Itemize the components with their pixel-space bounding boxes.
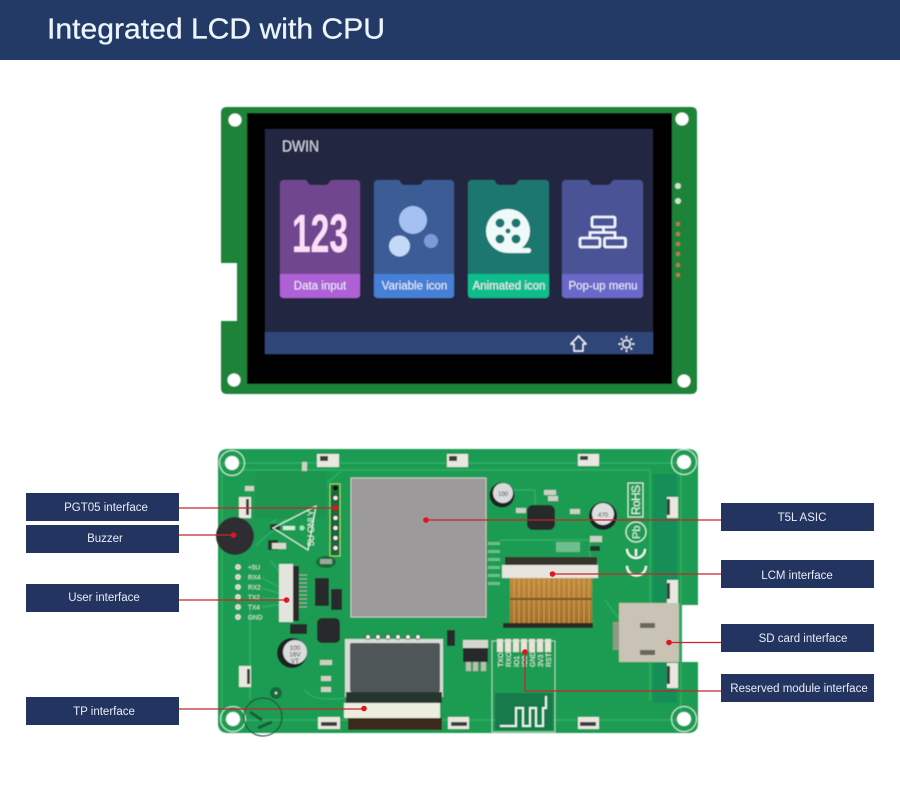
5V warning triangle <box>273 506 316 550</box>
capacitor right <box>589 502 617 530</box>
label: PGT05 interface <box>26 493 179 521</box>
icon: settings sun <box>618 336 634 352</box>
reserved module pads: RXO <box>506 651 513 667</box>
TP display window <box>345 634 443 703</box>
reserved module pads <box>492 639 555 732</box>
TP leader <box>179 706 367 711</box>
label: TP interface: TP interface <box>73 706 135 718</box>
regulator component <box>463 640 488 671</box>
label: LCM interface: LCM interface <box>761 570 833 582</box>
card: variable icon <box>374 180 454 298</box>
header banner <box>0 0 900 60</box>
SD leader <box>666 640 721 645</box>
card: variable icon: Variable icon <box>382 280 447 292</box>
power components near user connector <box>290 505 555 646</box>
edge contacts <box>675 183 681 277</box>
card: pop-up menu <box>562 180 643 298</box>
CE mark <box>627 549 646 576</box>
reserved module pads: IO0 <box>522 656 529 667</box>
black LCD bezel <box>247 113 672 384</box>
Pb-free mark <box>626 522 646 542</box>
card: pop-up menu: Pop-up menu <box>568 280 638 292</box>
card: data input <box>280 180 360 298</box>
screen <box>265 129 653 354</box>
user interface pad labels: +5U <box>248 564 260 572</box>
reserved module pads: IO1 <box>514 656 521 667</box>
RoHS mark: RoHS <box>629 485 643 515</box>
icon: home <box>571 336 586 351</box>
PGT05 header pins <box>330 484 340 556</box>
label: SD card interface: SD card interface <box>759 633 847 645</box>
LCM leader <box>550 571 721 577</box>
capacitor upper: 100 <box>498 492 509 498</box>
front PCB board <box>221 107 697 394</box>
user interface leader <box>179 597 289 603</box>
label: Buzzer: Buzzer <box>87 533 123 545</box>
buzzer <box>216 517 254 555</box>
silkscreen logo circle <box>244 687 282 736</box>
DWIN logo text: DWIN <box>282 138 319 156</box>
label: Reserved module interface <box>721 674 874 702</box>
TP connector <box>344 703 442 730</box>
capacitor right: 470 <box>598 513 609 519</box>
5V warning triangle: 5U ONLY <box>306 510 316 546</box>
reserved module pads: TXO <box>498 652 505 667</box>
callout leader lines <box>179 505 721 711</box>
user interface pad labels: TX4 <box>248 604 260 612</box>
card: data input: Data input <box>294 280 347 292</box>
label: PGT05 interface: PGT05 interface <box>64 502 148 514</box>
title: Integrated LCD with CPU <box>47 14 385 46</box>
label: LCM interface <box>721 560 874 588</box>
electrolytic capacitor <box>277 638 307 668</box>
user interface pad labels: TX2 <box>248 594 260 602</box>
card: animated icon: Animated icon <box>473 280 545 292</box>
card: animated icon <box>468 180 549 298</box>
reserved module pads: RST <box>546 652 553 667</box>
grey via field beside chip <box>488 542 580 585</box>
user interface pad labels <box>236 564 263 622</box>
user interface pad labels: RX2 <box>248 584 261 592</box>
card: data input: 123 <box>292 204 348 264</box>
user interface pad labels: RX4 <box>248 574 261 582</box>
label: T5L ASIC <box>721 503 874 531</box>
label: SD card interface <box>721 624 874 652</box>
bottom navigation bar <box>265 332 653 354</box>
back view of PCB <box>216 449 698 736</box>
clips along board edge <box>239 454 678 729</box>
user interface pad labels: GND <box>248 614 263 622</box>
T5L ASIC chip shield <box>351 478 486 617</box>
user FFC connector <box>279 564 307 622</box>
back PCB board <box>218 449 698 733</box>
PGT05 leader <box>179 505 338 511</box>
small SMD components <box>245 462 602 692</box>
label: User interface: User interface <box>68 592 140 604</box>
capacitor upper <box>490 482 514 508</box>
reserved module leader <box>522 649 721 691</box>
label: User interface <box>26 584 179 612</box>
front view of LCD module <box>221 107 697 394</box>
SD card socket <box>613 603 679 662</box>
label: Buzzer <box>26 525 179 553</box>
buzzer leader <box>179 532 236 538</box>
copper areas and traces <box>222 463 681 720</box>
T5L leader <box>423 517 721 523</box>
electrolytic capacitor: VT <box>291 658 299 665</box>
antenna <box>495 693 553 730</box>
reserved module pads: GND <box>530 651 537 667</box>
reserved module pads: 3V3 <box>538 654 545 667</box>
LCM connector and flex cable <box>502 557 598 628</box>
label: Reserved module interface: Reserved module interface <box>730 683 868 695</box>
label: TP interface <box>26 697 179 725</box>
electrolytic capacitor: 16V <box>289 652 301 658</box>
label: T5L ASIC: T5L ASIC <box>778 512 826 524</box>
electrolytic capacitor: 100 <box>290 645 301 652</box>
corner mounting holes <box>220 450 696 732</box>
Pb-free mark: Pb <box>631 526 643 539</box>
mounting holes <box>228 112 690 388</box>
